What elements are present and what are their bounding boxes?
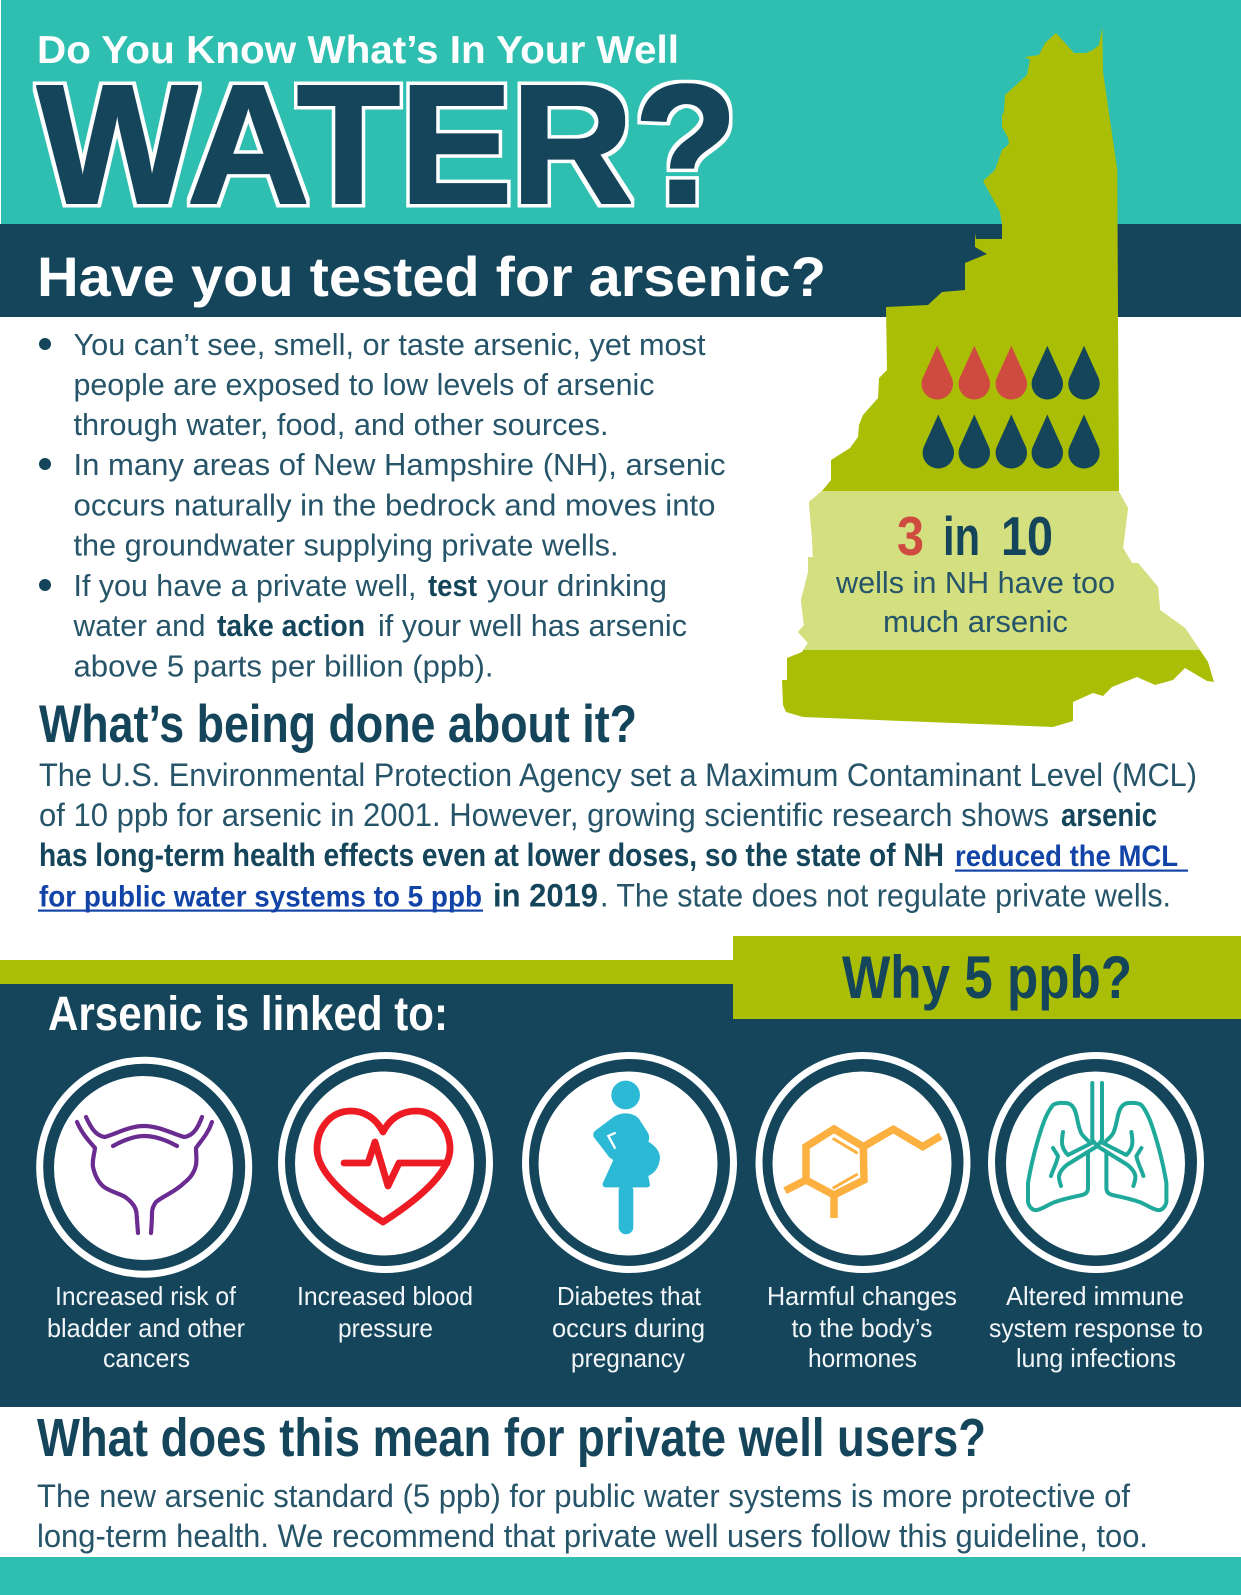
bullet three: [39, 568, 687, 684]
map: New Hampshire with statistic: [780, 27, 1220, 727]
lime strip: [0, 960, 733, 984]
paragraph: recommendation: long-term health. We recommend that private well users follow this guideline, too.: [37, 1518, 1148, 1554]
statistic: 3 in 10: in: [943, 505, 980, 567]
bullet two: the groundwater supplying private wells.: [74, 528, 618, 562]
paragraph: recommendation: [37, 1478, 1148, 1554]
bullet two: In many areas of New Hampshire (NH), arsenic: [74, 447, 726, 482]
caption: diabetes: Diabetes that: [557, 1281, 702, 1311]
icon: heart: [282, 1056, 490, 1270]
caption: immune response: lung infections: [1016, 1343, 1176, 1373]
statistic caption: [835, 565, 1115, 639]
callout: why 5 ppb: Why 5 ppb?: [842, 944, 1132, 1011]
icon: bladder: [40, 1060, 249, 1274]
link text: for public water systems to 5 ppb: [39, 880, 482, 914]
title word WATER?: WATER?: [37, 50, 738, 240]
statistic: 3 in 10: [897, 505, 1053, 567]
item: immune response: [989, 1056, 1203, 1373]
callout: why 5 ppb: [733, 936, 1241, 1019]
panel: arsenic health effects: [0, 936, 1241, 1407]
statistic caption: much arsenic: [883, 604, 1068, 639]
bullet one: [39, 327, 706, 442]
caption: bladder: bladder and other: [47, 1313, 245, 1343]
bullet one: people are exposed to low levels of arsenic: [74, 367, 654, 402]
state shape: [782, 27, 1214, 727]
caption: blood pressure: Increased blood: [297, 1281, 473, 1311]
bullet three: test: [428, 568, 477, 603]
bullet list: [39, 327, 726, 684]
title block: [37, 29, 738, 240]
heading: arsenic is linked to: Arsenic is linked to:: [48, 988, 448, 1041]
icons: ten water drops, three red: [922, 346, 1100, 468]
paragraph: regulation: The U.S. Environmental Protection Agency set a Maximum Contaminant Level (MCL): [39, 757, 1197, 793]
title line: Do You Know What’s In Your Well: [37, 29, 679, 72]
paragraph: regulation: [38, 757, 1197, 914]
bullet three: If you have a private well,: [74, 568, 416, 603]
link text: [38, 840, 1188, 914]
bullet three: your drinking: [487, 568, 667, 603]
caption: hormones: to the body’s: [792, 1313, 932, 1343]
bullet three: water and: [73, 608, 206, 643]
icon: pregnant woman: [526, 1056, 734, 1270]
item: blood pressure: [282, 1056, 490, 1343]
caption: immune response: Altered immune: [1006, 1281, 1184, 1311]
header band: [1, 0, 1241, 224]
caption: hormones: hormones: [808, 1343, 917, 1373]
caption: immune response: system response to: [989, 1313, 1203, 1343]
paragraph: regulation: in 2019: [493, 878, 598, 914]
paragraph: recommendation: The new arsenic standard (5 ppb) for public water systems is more protective of: [37, 1478, 1130, 1514]
bullet three: take action: [217, 608, 365, 643]
panel background: [0, 984, 1241, 1407]
icon: molecule: [759, 1056, 967, 1270]
caption: bladder: [47, 1281, 245, 1373]
paragraph: regulation: has long-term health effects even at lower doses, so the state of NH: [39, 837, 944, 873]
link text: reduced the MCL: [955, 840, 1178, 873]
statistic: 3 in 10: 10: [1001, 505, 1053, 567]
item: bladder: [40, 1060, 249, 1373]
caption: bladder: cancers: [103, 1343, 190, 1373]
paragraph: regulation: . The state does not regulate private wells.: [600, 878, 1171, 914]
icon: lungs: [992, 1056, 1200, 1270]
light band on state: [780, 491, 1220, 650]
caption: diabetes: [552, 1281, 705, 1373]
bullet one: through water, food, and other sources.: [74, 407, 608, 442]
bullet three: above 5 parts per billion (ppb).: [74, 648, 494, 684]
bullet two: occurs naturally in the bedrock and moves into: [74, 488, 716, 522]
item: hormones: [759, 1056, 967, 1373]
caption: hormones: Harmful changes: [767, 1281, 957, 1311]
statistic caption: wells in NH have too: [835, 565, 1115, 600]
caption: blood pressure: [297, 1281, 473, 1343]
paragraph: regulation: arsenic: [1061, 797, 1157, 833]
paragraph: regulation: of 10 ppb for arsenic in 2001. However, growing scientific research shows: [39, 797, 1049, 833]
caption: bladder: Increased risk of: [55, 1281, 237, 1311]
bullet three: if your well has arsenic: [378, 608, 687, 643]
bullet one: You can’t see, smell, or taste arsenic, yet most: [74, 327, 706, 362]
caption: diabetes: occurs during: [552, 1313, 705, 1343]
caption: blood pressure: pressure: [338, 1313, 433, 1343]
subheading band: [0, 224, 1241, 317]
heading: private well users: What does this mean for private well users?: [37, 1408, 986, 1468]
caption: hormones: [767, 1281, 957, 1373]
statistic: 3 in 10: 3: [897, 505, 924, 567]
caption: immune response: [989, 1281, 1203, 1373]
caption: diabetes: pregnancy: [571, 1343, 685, 1373]
footer band: [0, 1557, 1241, 1595]
bullet two: [39, 447, 726, 562]
heading: have you tested: Have you tested for arsenic?: [37, 245, 826, 308]
item: diabetes in pregnancy: [526, 1056, 734, 1373]
heading: what's being done: What’s being done about it?: [39, 695, 637, 754]
